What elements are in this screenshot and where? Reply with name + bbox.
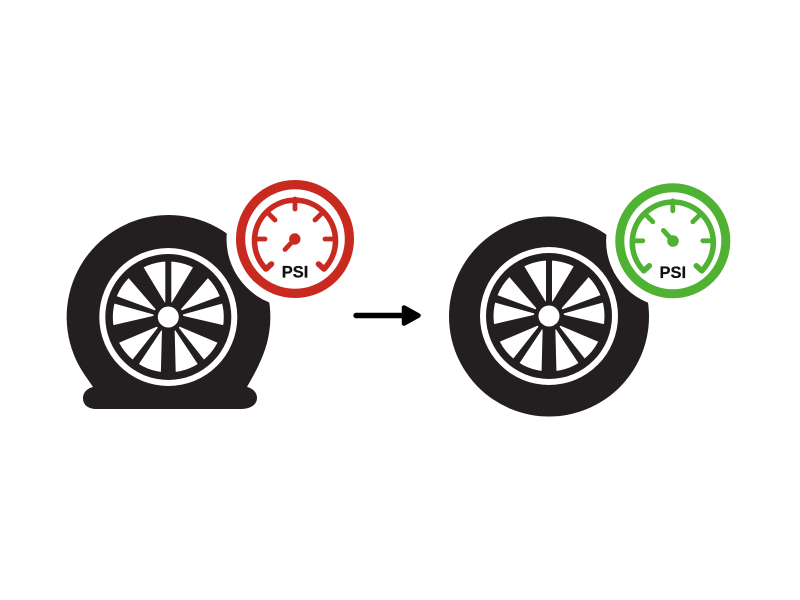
wheel rim [480,247,618,385]
inflated tire (correct pressure) [449,216,649,416]
PSI label: PSI [659,264,686,282]
flat tire (low pressure) [67,215,270,409]
wheel rim [99,248,237,386]
dial [254,199,336,269]
tire body [67,215,270,409]
arrow [356,308,418,324]
green ring [620,188,726,294]
white cut-out around badge [226,170,364,308]
dial [632,201,713,271]
tire body [449,216,649,416]
needle [285,233,300,250]
green gauge badge [606,174,740,308]
PSI label: PSI [282,263,308,281]
red ring [241,185,349,293]
needle [664,230,679,247]
red gauge badge [226,170,364,308]
white cut-out around badge [606,174,740,308]
